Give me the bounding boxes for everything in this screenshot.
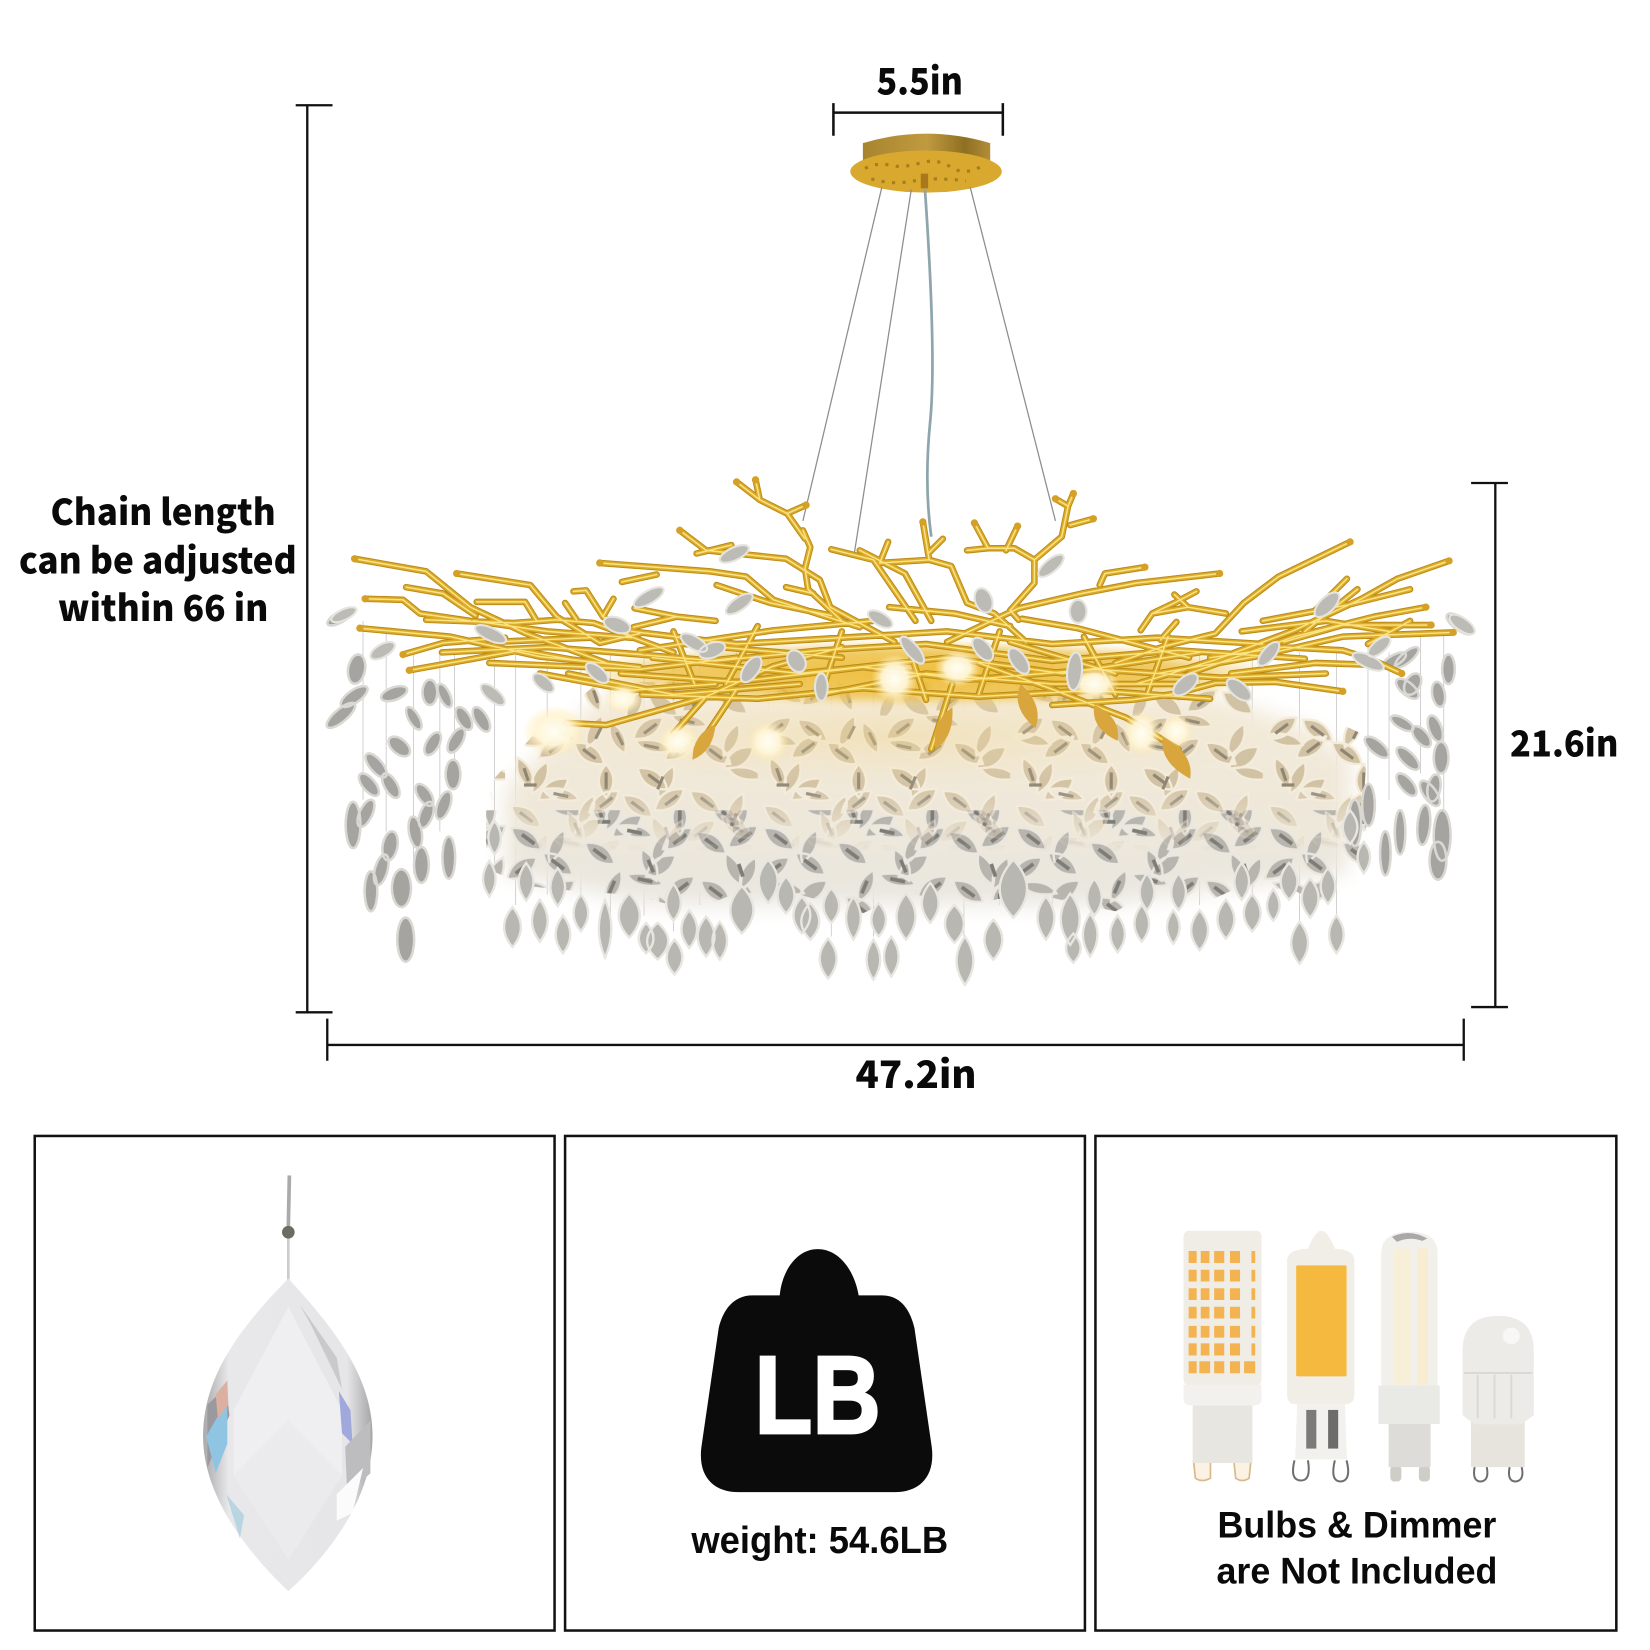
- gold branches: [355, 480, 1453, 749]
- dimension: chain length vertical: [19, 105, 333, 1012]
- dimension: ceiling plate width 5.5in: [833, 52, 1003, 136]
- dimension: ceiling plate width 5.5in: 5.5in: [877, 52, 963, 106]
- lit bulbs: [523, 649, 1193, 763]
- bulb 4: [1463, 1316, 1534, 1482]
- warm light on crystals: [516, 679, 1273, 794]
- dimension: height 21.6in: [1471, 483, 1618, 1007]
- gold leaves: [692, 684, 1191, 779]
- dimension: height 21.6in: 21.6in: [1510, 717, 1618, 768]
- bulb 3: [1379, 1232, 1440, 1482]
- crystal mass soft underlay: [505, 695, 1352, 905]
- crystal mass: lower grey drops: [486, 810, 1368, 913]
- dimension: chain length vertical: within 66 in: [58, 581, 268, 632]
- panel: crystal detail: [35, 1136, 555, 1631]
- chandelier illustration: [327, 134, 1475, 985]
- ceiling plate: [850, 134, 1002, 193]
- dimension: chain length vertical: Chain length: [51, 485, 276, 536]
- bulbs notice: Bulbs & Dimmer: [1218, 1504, 1496, 1545]
- dimension: width 47.2in: 47.2in: [856, 1044, 977, 1099]
- marquise crystal: [203, 1279, 373, 1591]
- bottom fringe crystals: [483, 810, 1370, 985]
- icon: weight: [701, 1249, 932, 1492]
- bulb 1: [1184, 1231, 1262, 1481]
- icon: four G9 bulbs: [1184, 1231, 1534, 1482]
- hanging strings: [363, 621, 1444, 937]
- canopy crystals: [331, 545, 1475, 705]
- bulbs notice: [1216, 1504, 1497, 1592]
- bulb 2: [1287, 1231, 1354, 1482]
- weight label: weight: 54.6LB: [690, 1520, 948, 1562]
- golden glow band: [558, 640, 1294, 707]
- bulbs notice: are Not Included: [1216, 1551, 1497, 1592]
- crystal string and bead: [282, 1175, 295, 1282]
- suspension wires: [803, 187, 1055, 552]
- outer crystal clusters: [327, 608, 1473, 962]
- dimension: width 47.2in: [327, 1019, 1464, 1099]
- crystal mass: upper warm drops: [484, 673, 1379, 852]
- panel: bulbs: [1095, 1136, 1616, 1631]
- icon: weight: LB: [754, 1334, 881, 1457]
- panel: weight: [565, 1136, 1085, 1631]
- dimension: chain length vertical: can be adjusted: [19, 534, 297, 585]
